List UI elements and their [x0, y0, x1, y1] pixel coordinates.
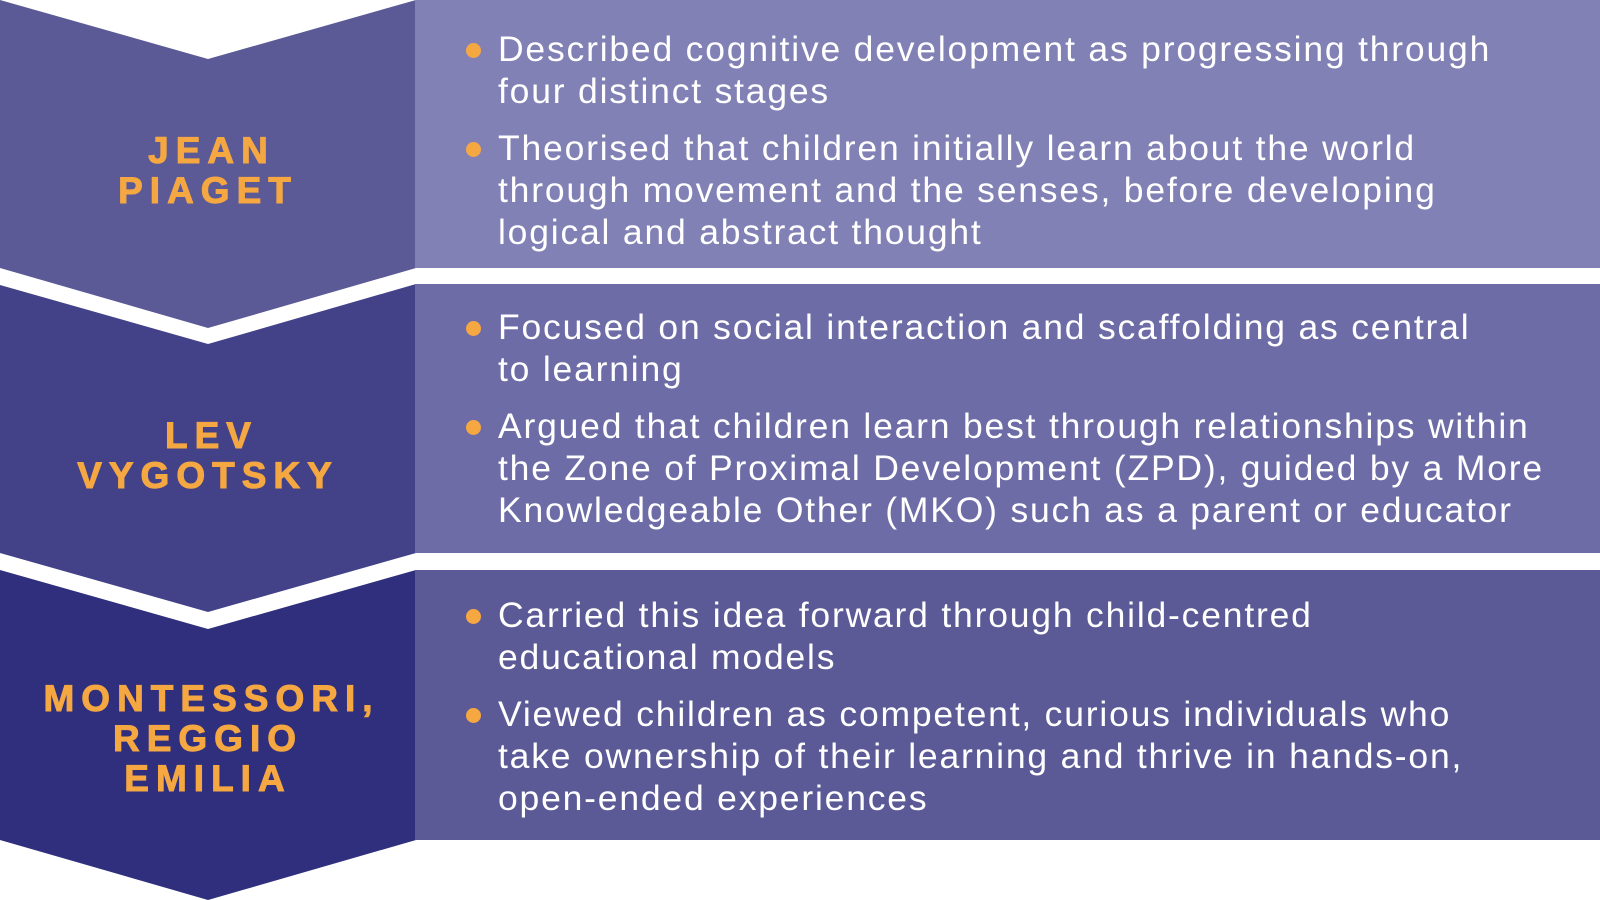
text: Viewed children as competent, curious individuals who — [498, 694, 1451, 734]
text: Argued that children learn best through relationships within — [498, 406, 1530, 446]
text: logical and abstract thought — [498, 212, 983, 252]
name: Jean Piaget: JEAN — [148, 130, 275, 171]
text: open-ended experiences — [498, 778, 928, 818]
text: take ownership of their learning and thrive in hands-on, — [498, 736, 1463, 776]
name: Montessori, Reggio Emilia: MONTESSORI, — [43, 678, 380, 719]
text: Knowledgeable Other (MKO) such as a parent or educator — [498, 490, 1513, 530]
text: Carried this idea forward through child-centred — [498, 595, 1313, 635]
name: Montessori, Reggio Emilia — [43, 678, 380, 799]
text: Focused on social interaction and scaffolding as central — [498, 307, 1470, 347]
bullet: Vygotsky 1 — [466, 307, 1470, 389]
name: Lev Vygotsky: LEV — [165, 415, 258, 456]
panel: Piaget — [415, 0, 1600, 268]
name: Lev Vygotsky: VYGOTSKY — [77, 455, 339, 496]
text: through movement and the senses, before developing — [498, 170, 1437, 210]
text: four distinct stages — [498, 71, 830, 111]
text: to learning — [498, 349, 684, 389]
name: Jean Piaget: PIAGET — [118, 170, 298, 211]
bullet: Piaget 2 — [466, 128, 1437, 252]
chevron: Lev Vygotsky — [0, 284, 416, 612]
chevron column — [0, 0, 416, 900]
bullet: Piaget 1 — [466, 29, 1491, 111]
name: Jean Piaget — [118, 130, 298, 211]
name: Lev Vygotsky — [76, 415, 339, 496]
chevron: Jean Piaget — [0, 0, 416, 328]
text: Theorised that children initially learn about the world — [498, 128, 1416, 168]
name: Montessori, Reggio Emilia: REGGIO — [113, 718, 303, 759]
bullet: Montessori 1 — [466, 595, 1313, 677]
bullet: Montessori 2 — [466, 694, 1463, 818]
chevron: Montessori — [0, 570, 416, 900]
panel: Vygotsky — [415, 284, 1600, 553]
text: Described cognitive development as progressing through — [498, 29, 1491, 69]
text: the Zone of Proximal Development (ZPD), guided by a More — [498, 448, 1544, 488]
bullet: Vygotsky 2 — [466, 406, 1544, 530]
panel: Montessori — [415, 570, 1600, 840]
name: Montessori, Reggio Emilia: EMILIA — [124, 758, 292, 799]
text: educational models — [498, 637, 836, 677]
